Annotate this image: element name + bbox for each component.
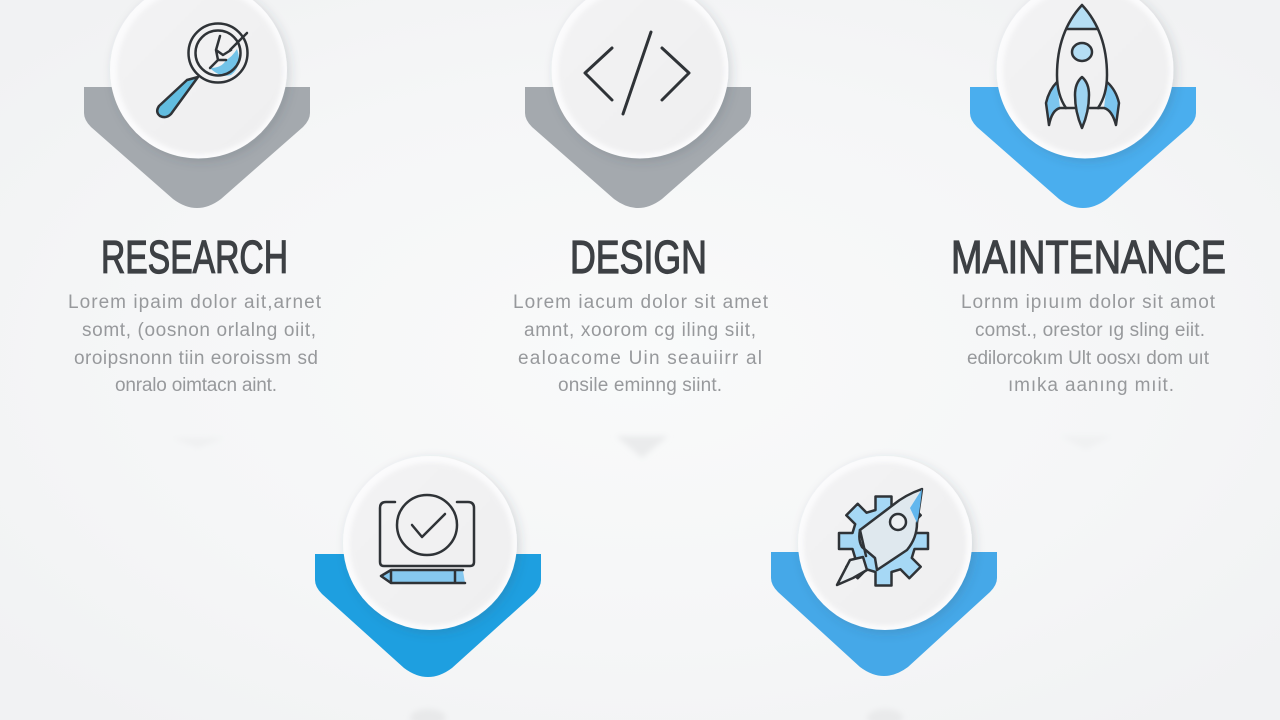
decorative: faint markers: [172, 436, 1112, 720]
text: research description: onralo oimtacn aint.: [115, 375, 277, 396]
panel: design: [513, 0, 769, 396]
text: maintenance description: ımıka aanıng mıit.: [1008, 375, 1174, 396]
text: research description: somt, (oosnon orlalng oiit,: [82, 320, 316, 341]
text: maintenance description: Lornm ipıuım dolor sit amot: [961, 292, 1216, 313]
chevron: design: [525, 87, 751, 208]
disc: maintenance: [996, 0, 1174, 158]
text: design description: ealoacome Uin seauiirr al: [518, 348, 762, 369]
icon: magnifying glass: [157, 24, 248, 117]
panel: development: [771, 456, 997, 676]
heading: research: RESEARCH: [101, 231, 288, 283]
icon: rocket and gear: [837, 489, 928, 586]
chevron: research: [84, 87, 310, 208]
chevron: testing: [315, 554, 541, 677]
text: design description: Lorem iacum dolor sit amet: [513, 292, 769, 313]
text: maintenance description: edilorcokım Ult oosxı dom uıt: [967, 348, 1210, 369]
panel: research: [68, 0, 322, 396]
text: maintenance description: comst., orestor ıg sling eiit.: [975, 320, 1205, 341]
panel: testing: [315, 456, 541, 677]
icon: checkmark on screen with pencil: [380, 495, 474, 583]
disc: testing: [343, 456, 517, 630]
text: design description: onsile eminng siint.: [558, 375, 722, 396]
disc: research: [110, 0, 287, 158]
disc: development: [798, 456, 972, 630]
disc: design: [552, 0, 728, 158]
text: research description: Lorem ipaim dolor ait,arnet: [68, 292, 322, 313]
text: maintenance description: [961, 292, 1216, 396]
icon: rocket: [1046, 5, 1119, 128]
icon: code brackets: [585, 32, 689, 114]
chevron: development: [771, 552, 997, 676]
text: research description: [68, 292, 322, 396]
text: design description: [513, 292, 769, 396]
heading: maintenance: MAINTENANCE: [951, 231, 1226, 283]
text: research description: oroipsnonn tiin eoroissm sd: [74, 348, 318, 369]
heading: design: DESIGN: [570, 231, 707, 283]
panel: maintenance: [951, 0, 1226, 396]
text: design description: amnt, xoorom cg iling siit,: [524, 320, 756, 341]
chevron: maintenance: [970, 87, 1196, 208]
